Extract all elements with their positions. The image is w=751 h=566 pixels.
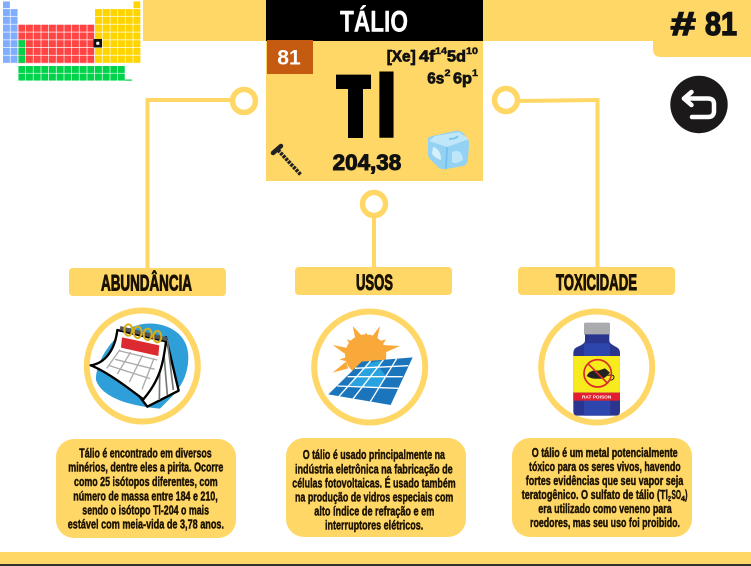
text block: toxicity: 2 [668, 496, 671, 503]
electron configuration: 14 [435, 46, 448, 57]
text block: uses: alto índice de refração e em [314, 505, 434, 519]
atomic number box [267, 40, 313, 74]
icon: rat poison bottle: RAT POISON [582, 394, 611, 399]
title bar [266, 0, 483, 41]
text block: uses: células fotovoltaicas. É usado também [292, 475, 456, 490]
heading: abundancia [69, 268, 226, 296]
text block: abundance: Tálio é encontrado em diversos [79, 447, 212, 461]
text block: toxicity: fortes evidências que seu vapor seja [526, 474, 684, 488]
text block: toxicity: O tálio é um metal potencialmente [532, 446, 678, 460]
text block: abundance: estável com meia-vida de 3,78 anos. [68, 517, 224, 531]
element symbol: T [337, 60, 370, 154]
text block: toxicity: tóxico para os seres vivos, havendo [529, 460, 681, 474]
text block: abundance: minérios, dentre eles a pirita. Ocorre [68, 461, 223, 475]
electron configuration: 6p [453, 70, 472, 87]
connector: uses [362, 192, 386, 267]
text block: uses: indústria eletrônica na fabricação de [295, 462, 453, 476]
electron configuration: [Xe] [387, 48, 416, 66]
element symbol: l [376, 60, 396, 154]
atomic mass: 204,38 [333, 150, 401, 175]
heading: toxicidade [518, 267, 675, 295]
periodic table minimap [3, 1, 141, 81]
icon: ice cube [428, 131, 469, 169]
text block: toxicity [512, 438, 692, 537]
text block: abundance: número de massa entre 184 e 210, [73, 489, 218, 503]
electron configuration: 2 [444, 68, 450, 79]
element number: 81 [705, 6, 737, 42]
text block: uses: O tálio é usado principalmente na [303, 448, 446, 462]
text block: abundance [56, 439, 236, 538]
electron configuration: 6s [427, 70, 444, 87]
text block: toxicity: era utilizado como veneno para [538, 502, 672, 516]
heading: usos: USOS [356, 270, 393, 295]
icon: calendar [87, 310, 198, 422]
heading: toxicidade: TOXICIDADE [556, 270, 637, 295]
icon: solar panel [314, 312, 425, 422]
footer bar [0, 552, 751, 566]
top banner right with element number [483, 0, 751, 57]
electron configuration [387, 46, 479, 87]
electron configuration: 1 [472, 68, 479, 79]
icon: screw [273, 146, 301, 175]
text block: toxicity: 4 [681, 496, 685, 503]
text block: abundance: como 25 isótopos diferentes, com [74, 475, 218, 489]
text block: toxicity: teratogênico. O sulfato de tálio (Tl [522, 488, 668, 502]
heading: usos [295, 267, 452, 295]
element number: # [670, 6, 695, 42]
electron configuration: 10 [466, 46, 478, 57]
title bar: TÁLIO [340, 4, 408, 38]
text block: toxicity: ) [685, 488, 688, 502]
text block: toxicity: roedores, mas seu uso foi proibido. [530, 516, 680, 530]
text block: abundance: sendo o isótopo Tl-204 o mais [82, 503, 209, 517]
element card [266, 0, 483, 181]
text block: uses [286, 438, 466, 537]
electron configuration: 4f [419, 48, 436, 66]
icon: rat poison bottle [541, 312, 652, 422]
heading: abundancia: ABUNDÂNCIA [101, 270, 192, 296]
connector: abundance [148, 90, 256, 268]
text block: uses: na produção de vidros especiais com [295, 491, 453, 505]
text block: toxicity: SO [672, 488, 681, 502]
element number [670, 6, 737, 42]
top banner left [143, 0, 266, 41]
atomic number box: 81 [277, 46, 301, 70]
back button [670, 76, 728, 133]
text block: uses: interruptores elétricos. [325, 519, 423, 533]
electron configuration: 5d [447, 48, 466, 66]
connector: toxicity [494, 88, 598, 267]
